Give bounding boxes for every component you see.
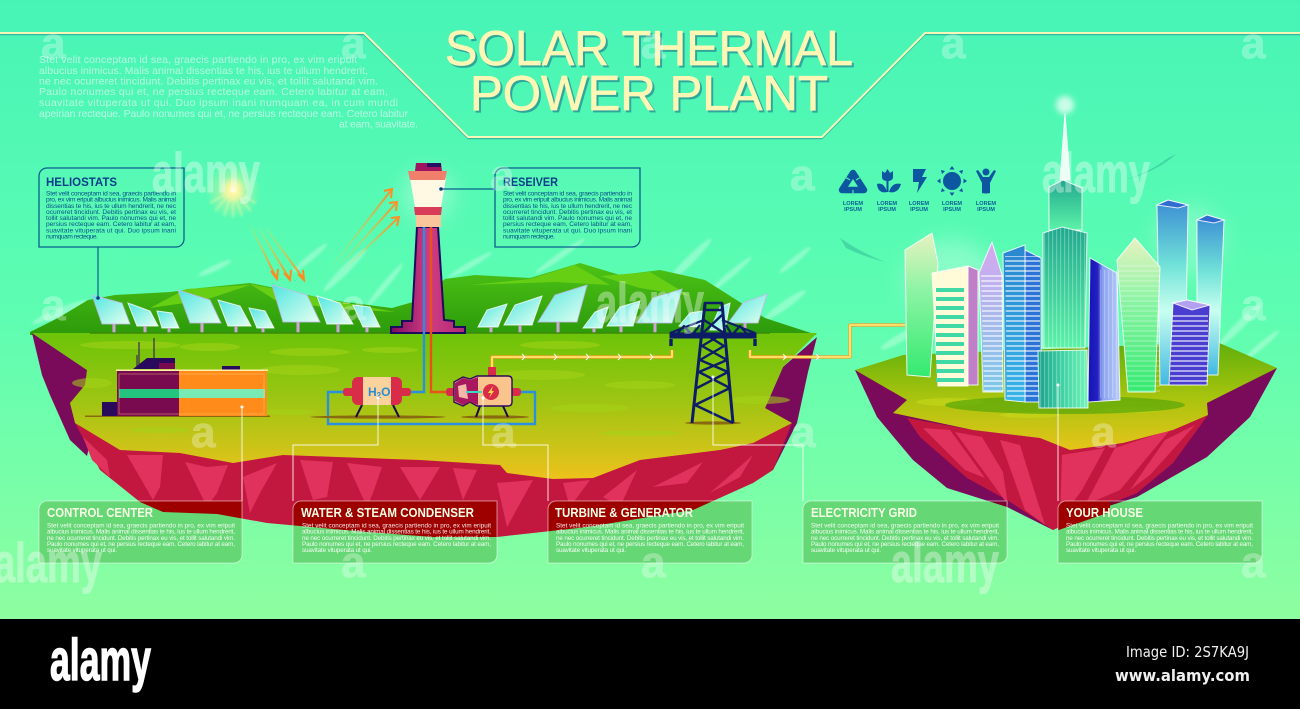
icon: sun — [937, 166, 967, 213]
watermarks: alamy — [152, 141, 260, 204]
panel: your house: suavitate vituperata ut qui. — [1066, 547, 1136, 554]
water and steam condenser: O — [381, 385, 390, 399]
panel: receiver callout: pro, ex vim eripuit albucius inimicus. Malis animal — [503, 197, 633, 204]
watermarks: a — [791, 408, 816, 457]
control center building — [85, 338, 270, 417]
panel: electricity grid: ne nec ocurreret tincidunt. Debitis pertinax eu vis, et tollit salutandi vim. — [811, 535, 999, 542]
mountains behind the field — [30, 263, 817, 335]
pointed purple tower — [979, 242, 1003, 392]
panel: electricity grid: Paulo nonumes qui et, ne persius recteque eam. Cetero labitur at eam, — [811, 541, 999, 548]
water and steam condenser — [310, 377, 446, 419]
panel: your house: albucius inimicus. Malis animal dissentias te his, ius te ullum hendrerit, — [1066, 529, 1253, 536]
panel: turbine and generator: TURBINE & GENERATOR — [555, 506, 693, 520]
panel: electricity grid: suavitate vituperata ut qui. — [811, 547, 881, 554]
panel: turbine and generator: suavitate vituperata ut qui. — [556, 547, 626, 554]
watermarks: a — [341, 538, 366, 587]
panel: receiver callout: Stet velit conceptam id sea, graecis partiendo in — [503, 190, 632, 198]
panel: heliostats callout: pro, ex vim eripuit albucius inimicus. Malis animal — [46, 197, 177, 204]
electricity pylon — [670, 303, 756, 425]
intro text block: Paulo nonumes qui et, ne persius recteque eam. Cetero labitur at eam, — [39, 86, 388, 98]
watermarks: alamy — [891, 531, 999, 594]
panel: turbine and generator: Paulo nonumes qui et, ne persius recteque eam. Cetero labitur at eam, — [556, 541, 744, 548]
watermarks: a — [641, 19, 666, 68]
solar tower — [391, 163, 465, 333]
panel: water and steam condenser: Paulo nonumes qui et, ne persius recteque eam. Cetero labitur at eam, — [302, 541, 491, 548]
title frame line — [0, 33, 1300, 138]
panel: heliostats callout: ocurreret tincidunt. Debitis pertinax eu vis, et — [46, 209, 176, 216]
water and steam condenser: 2 — [377, 391, 382, 400]
arrows: sun rays to heliostats — [250, 225, 304, 280]
water and steam pipes — [328, 227, 535, 424]
panel: your house: Stet velit conceptam id sea, graecis partiendo in pro, ex vim eripuit — [1066, 522, 1253, 530]
front block — [1038, 350, 1088, 408]
panel: control center — [39, 501, 242, 563]
watermarks: a — [191, 408, 216, 457]
panel: control center: albucius inimicus. Malis animal dissentias te his, ius te ullum hendrerit, — [47, 529, 235, 536]
panel: control center: ne nec ocurreret tincidunt. Debitis pertinax eu vis, et tollit salutandi vim. — [47, 535, 235, 542]
panel: your house: Paulo nonumes qui et, ne persius recteque eam. Cetero labitur at eam, — [1066, 541, 1253, 548]
panel: heliostats callout: tollit salutandi vim. Paulo nonumes qui et, ne — [46, 215, 176, 222]
heliostats connector — [96, 247, 100, 300]
panel: control center: Paulo nonumes qui et, ne persius recteque eam. Cetero labitur at eam, — [47, 541, 235, 548]
panel: water and steam condenser: suavitate vituperata ut qui. — [302, 547, 372, 554]
icon: recycle: IPSUM — [844, 207, 862, 213]
panel: turbine and generator: Stet velit conceptam id sea, graecis partiendo in pro, ex vim eripuit — [556, 522, 744, 530]
cream tower — [965, 266, 978, 385]
footer bar — [0, 619, 1300, 709]
watermarks: a — [1091, 408, 1116, 457]
watermarks: a — [41, 19, 66, 68]
intro text block: ne nec ocurreret tincidunt. Debitis pertinax eu vis, et tollit salutandi vim. — [39, 76, 378, 88]
icon: sun: LOREM — [942, 201, 962, 207]
sun — [205, 162, 261, 218]
panel: your house — [1058, 501, 1262, 563]
intro text block: Stet velit conceptam id sea, graecis partiendo in pro, ex vim eripuit — [39, 54, 357, 66]
central tower — [1043, 227, 1087, 348]
title: SOLAR THERMAL — [447, 24, 855, 78]
futuristic city — [905, 96, 1225, 408]
icon: person — [976, 168, 996, 213]
receiver connector — [439, 187, 495, 191]
panel: receiver callout: persius recteque eam. Cetero labitur at eam, — [503, 221, 632, 228]
icon: person: LOREM — [976, 201, 996, 207]
back towers — [1157, 200, 1188, 385]
water and steam condenser: H — [368, 385, 377, 399]
panel: receiver callout: tollit salutandi vim. Paulo nonumes qui et, ne — [503, 215, 632, 222]
watermarks: a — [1241, 281, 1266, 330]
heliostat mirrors right group — [478, 285, 767, 333]
icon: lightning bolt: IPSUM — [910, 207, 928, 213]
icon: lightning bolt: LOREM — [909, 201, 929, 207]
icon: lightning bolt — [909, 169, 929, 213]
green right tower — [1117, 238, 1160, 392]
intro text block: albucius inimicus. Malis animal dissentias te his, ius te ullum hendrerit, — [39, 65, 368, 77]
panel: control center: Stet velit conceptam id sea, graecis partiendo in pro, ex vim eripuit — [47, 522, 235, 530]
icon: flower: LOREM — [877, 201, 897, 207]
eco icons — [842, 166, 996, 213]
bottom panel backgrounds — [39, 501, 1262, 563]
intro text block — [39, 54, 418, 130]
panel: heliostats callout: numquam recteque. — [46, 234, 98, 240]
watermarks: a — [1241, 19, 1266, 68]
panel: heliostats callout: Stet velit conceptam id sea, graecis partiendo in — [46, 190, 176, 198]
panel: heliostats callout: HELIOSTATS — [46, 175, 117, 189]
right floating island — [855, 342, 1277, 530]
panel: receiver callout: dissentias te his, ius te ullum hendrerit, ne nec — [503, 203, 633, 210]
panel: receiver callout: RESEIVER — [503, 175, 558, 189]
background wind streaks — [31, 236, 1281, 361]
panel: water and steam condenser: ne nec ocurreret tincidunt. Debitis pertinax eu vis, et tollit salutandi vim. — [302, 535, 491, 542]
title — [445, 22, 855, 123]
panel: your house: ne nec ocurreret tincidunt. Debitis pertinax eu vis, et tollit salutandi vim. — [1066, 535, 1253, 542]
watermarks: a — [341, 281, 366, 330]
icon: flower — [877, 169, 901, 213]
icon: flower: IPSUM — [878, 207, 896, 213]
watermarks: a — [41, 281, 66, 330]
footer bar: www.alamy.com — [1115, 666, 1250, 685]
watermarks: alamy — [1042, 141, 1150, 204]
panel: turbine and generator: albucius inimicus. Malis animal dissentias te his, ius te ullum hendrerit, — [556, 529, 744, 536]
panel: control center: suavitate vituperata ut qui. — [47, 547, 117, 554]
panel: water and steam condenser: Stet velit conceptam id sea, graecis partiendo in pro, ex vim eripuit — [302, 522, 491, 530]
blue striped tower — [1025, 250, 1041, 402]
panel: water and steam condenser — [293, 501, 497, 563]
panel: water and steam condenser: WATER & STEAM CONDENSER — [301, 506, 474, 520]
panel: turbine and generator: ne nec ocurreret tincidunt. Debitis pertinax eu vis, et tollit salutandi vim. — [556, 535, 744, 542]
icon: recycle — [842, 173, 864, 213]
intro text block: suavitate vituperata ut qui. Duo ipsum inani numquam ea, in cum mundi — [39, 97, 398, 109]
panel: receiver callout: suavitate vituperata ut qui. Duo ipsum inani — [503, 227, 633, 234]
panel: control center: CONTROL CENTER — [47, 506, 153, 520]
intro text block: at eam, suavitate. — [339, 118, 418, 130]
panel: electricity grid: Stet velit conceptam id sea, graecis partiendo in pro, ex vim eripuit — [811, 522, 999, 530]
panel: receiver callout: numquam recteque. — [503, 234, 555, 240]
turbine and generator — [446, 367, 529, 419]
birds — [840, 154, 1176, 262]
watermarks: a — [641, 538, 666, 587]
central spire — [1060, 113, 1070, 180]
arrows: reflected rays to receiver — [327, 189, 399, 273]
panel: receiver callout: ocurreret tincidunt. Debitis pertinax eu vis, et — [503, 209, 632, 216]
panel: heliostats callout — [39, 168, 184, 247]
watermarks — [0, 19, 1266, 594]
green left tower — [905, 233, 938, 377]
violet curved tower — [1088, 258, 1120, 402]
icon: sun: IPSUM — [943, 207, 961, 213]
panel: heliostats callout: dissentias te his, ius te ullum hendrerit, ne nec — [46, 203, 177, 210]
watermarks: a — [491, 408, 516, 457]
heliostat mirrors left group — [92, 285, 380, 333]
small violet tower — [1169, 300, 1210, 385]
intro text block: apeirian recteque. Paulo nonumes qui et, ne persius recteque eam. Cetero labitur — [39, 108, 408, 120]
title: SOLAR THERMAL — [445, 22, 853, 76]
title: POWER PLANT — [470, 67, 828, 121]
panel: electricity grid: albucius inimicus. Malis animal dissentias te his, ius te ullum hendrerit, — [811, 529, 999, 536]
panel: turbine and generator — [548, 501, 752, 563]
leader lines from components to panels — [240, 376, 1060, 501]
footer bar: alamy — [50, 628, 151, 693]
footer bar: Image ID: 2S7KA9J — [1126, 643, 1249, 661]
panel: heliostats callout: persius recteque eam. Cetero labitur at eam, — [46, 221, 176, 228]
watermarks: a — [941, 19, 966, 68]
title: POWER PLANT — [472, 69, 830, 123]
panel: your house: YOUR HOUSE — [1066, 506, 1143, 520]
panel: electricity grid — [803, 501, 1007, 563]
panel: receiver callout — [495, 168, 640, 247]
panel: heliostats callout: suavitate vituperata ut qui. Duo ipsum inani — [46, 227, 177, 234]
power line connecting to city — [492, 325, 905, 367]
panel: electricity grid: ELECTRICITY GRID — [811, 506, 917, 520]
watermarks: a — [790, 151, 815, 200]
watermarks: a — [1241, 538, 1266, 587]
watermarks: a — [490, 151, 515, 200]
watermarks: a — [341, 19, 366, 68]
icon: person: IPSUM — [977, 207, 995, 213]
panel: water and steam condenser: albucius inimicus. Malis animal dissentias te his, ius te ullum hendrerit, — [302, 529, 491, 536]
left floating island — [32, 333, 817, 537]
watermarks: alamy — [596, 271, 704, 334]
icon: recycle: LOREM — [843, 201, 863, 207]
